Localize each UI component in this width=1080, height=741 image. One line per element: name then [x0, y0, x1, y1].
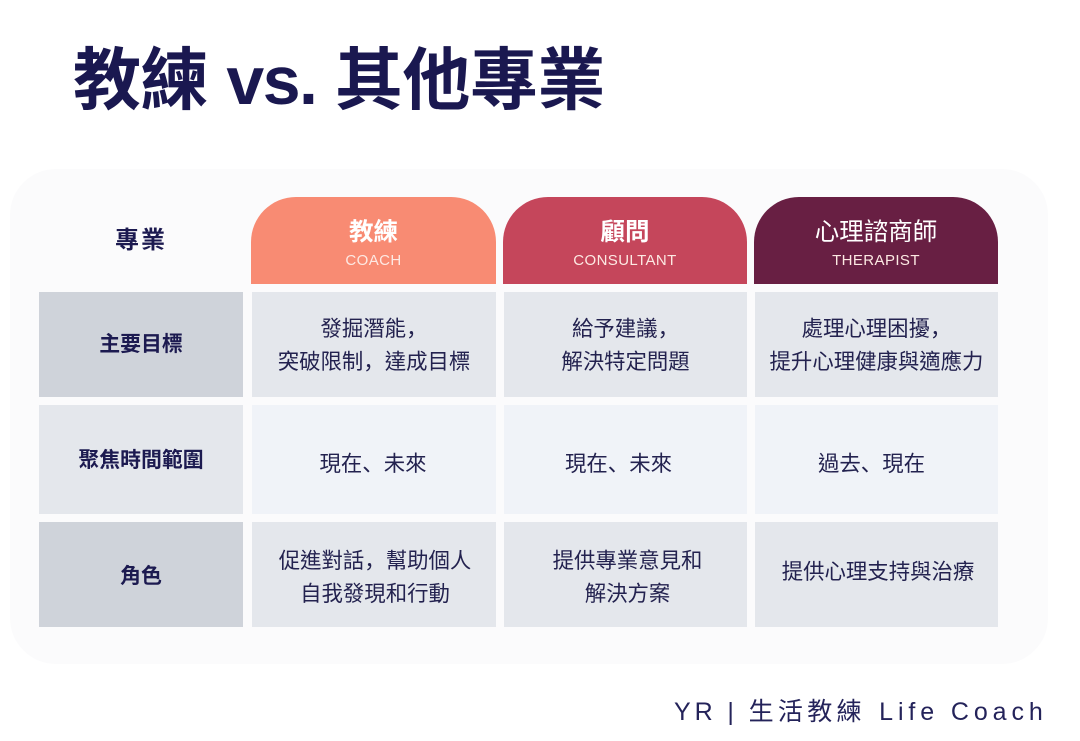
- cell: coach role: [252, 522, 496, 627]
- cell: coach goal: 突破限制，達成目標: [278, 350, 470, 374]
- row label: time focus: [39, 405, 243, 514]
- cell: coach time focus: 現在、未來: [320, 452, 426, 476]
- column header: therapist: 心理諮商師: [815, 219, 937, 246]
- cell: consultant time focus: 現在、未來: [565, 452, 672, 476]
- cell: consultant role: 提供專業意見和: [553, 548, 702, 572]
- row label: role: [39, 522, 243, 627]
- cell: coach goal: 發掘潛能，: [320, 317, 427, 341]
- column header: therapist: [754, 197, 998, 284]
- row label: role: 角色: [120, 564, 162, 588]
- row label: main goal: 主要目標: [99, 332, 183, 356]
- column header: coach: 教練: [349, 219, 398, 246]
- column header: consultant: CONSULTANT: [573, 252, 677, 269]
- cell: coach role: 自我發現和行動: [300, 582, 450, 606]
- cell: consultant goal: 解決特定問題: [561, 350, 690, 374]
- cell: therapist time focus: [755, 405, 998, 514]
- cell: coach role: 促進對話，幫助個人: [279, 548, 471, 572]
- column header: coach: [251, 197, 496, 284]
- heading: profession column: 專業: [115, 227, 167, 254]
- cell: therapist time focus: 過去、現在: [818, 452, 925, 476]
- cell: consultant goal: [504, 292, 747, 397]
- cell: therapist goal: 處理心理困擾，: [802, 317, 951, 341]
- column header: coach: COACH: [345, 252, 402, 269]
- footer credit: YR | 生活教練 Life Coach: [674, 698, 1048, 726]
- column header: consultant: 顧問: [600, 219, 650, 246]
- cell: therapist goal: [755, 292, 998, 397]
- panel: comparison table: [10, 169, 1048, 664]
- cell: consultant role: 解決方案: [585, 582, 670, 606]
- row label: time focus: 聚焦時間範圍: [78, 448, 204, 472]
- cell: consultant time focus: [504, 405, 747, 514]
- title: 教練 vs. 其他專業: [73, 43, 605, 119]
- cell: therapist goal: 提升心理健康與適應力: [770, 350, 983, 374]
- column header: therapist: THERAPIST: [832, 252, 920, 269]
- column header: consultant: [503, 197, 747, 284]
- cell: consultant goal: 給予建議，: [572, 317, 679, 341]
- row label: main goal: [39, 292, 243, 397]
- cell: consultant role: [504, 522, 747, 627]
- cell: coach goal: [252, 292, 496, 397]
- cell: therapist role: 提供心理支持與治療: [782, 560, 974, 584]
- cell: coach time focus: [252, 405, 496, 514]
- cell: therapist role: [755, 522, 998, 627]
